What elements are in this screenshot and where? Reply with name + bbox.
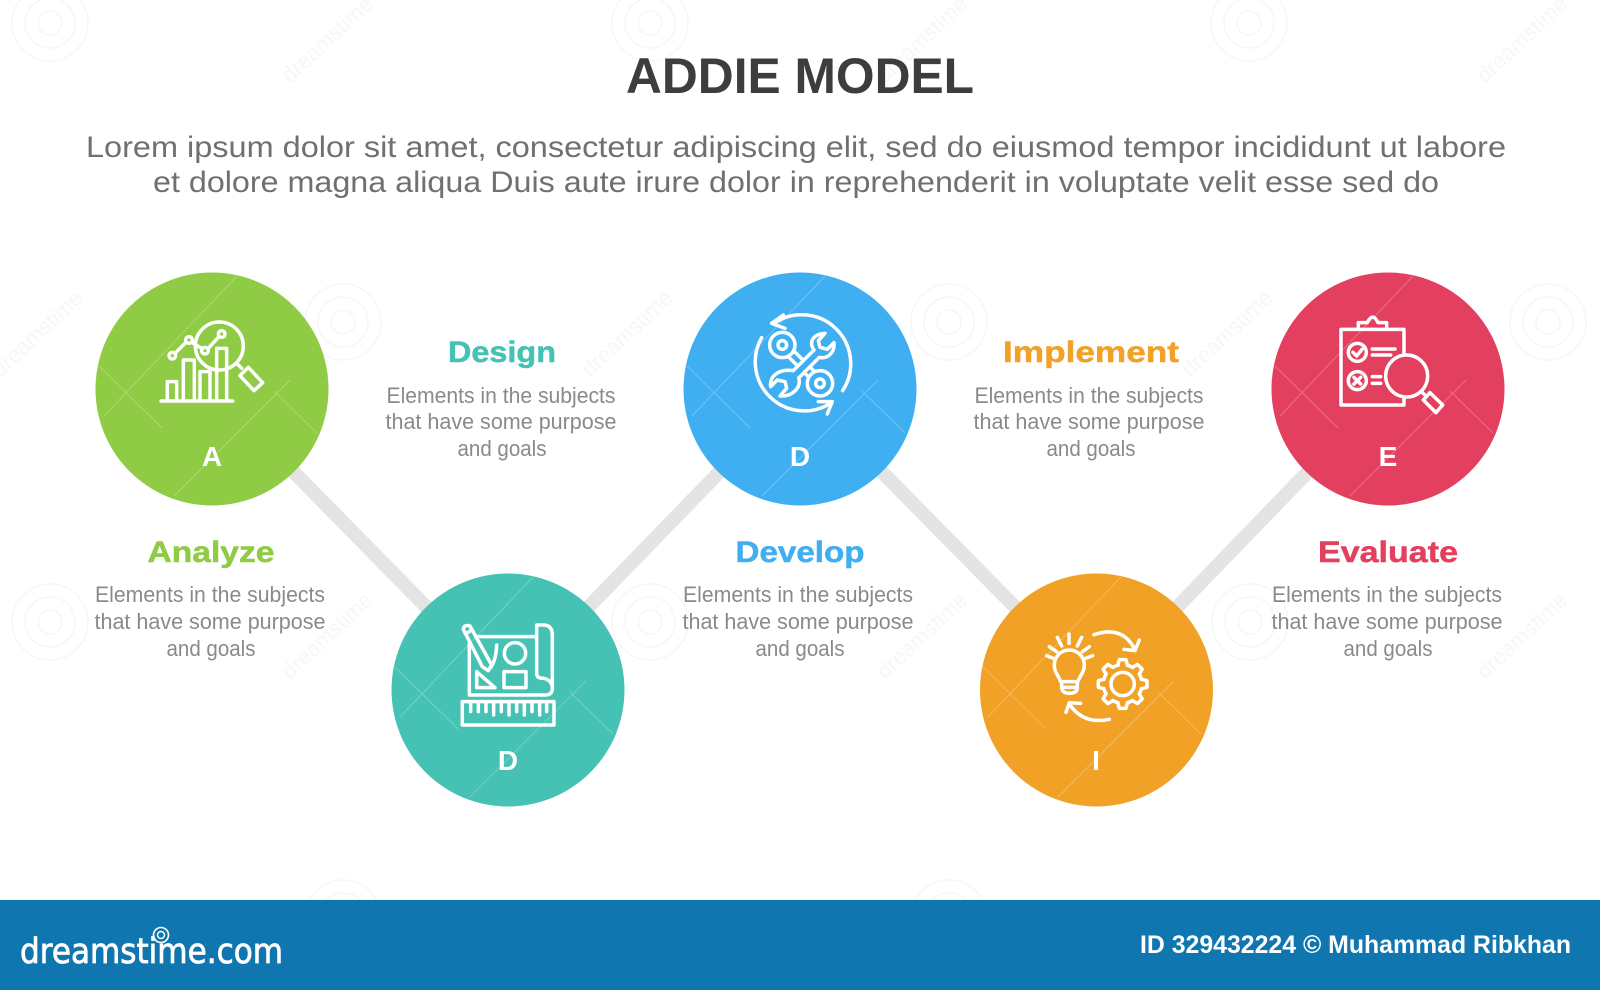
credit text: ID 329432224 © Muhammad Ribkhan (1140, 931, 1571, 959)
text: Evaluate description: Elements in the subjects (1272, 582, 1502, 607)
text: dreamstime (871, 587, 972, 684)
text: Implement description: and goals (1046, 436, 1136, 461)
letter E: E (1379, 441, 1397, 472)
icon: light bulb and gear (1047, 632, 1147, 721)
footer bar (0, 900, 1600, 990)
subtitle text (86, 131, 1506, 199)
text: Implement description: Elements in the subjects (974, 383, 1204, 408)
heading: Design: Design (448, 336, 556, 369)
text: Analyze description: Elements in the subjects (95, 582, 325, 607)
letter I: I (1092, 745, 1100, 776)
letter A: A (202, 441, 222, 472)
step: Design (386, 336, 624, 806)
text: Design description: and goals (458, 436, 546, 461)
text: Evaluate description: that have some purpose (1272, 609, 1502, 634)
circle: A (96, 272, 328, 506)
text: dreamstime (576, 285, 677, 382)
connector zigzag line (212, 389, 1388, 690)
step: Evaluate (1272, 272, 1504, 661)
subtitle text: et dolore magna aliqua Duis aute irure dolor in reprehenderit in voluptate velit esse sed do (153, 166, 1439, 199)
text: Analyze description (94, 582, 326, 661)
circle: D (392, 574, 624, 806)
icon: clipboard with magnifier (1341, 317, 1443, 413)
icon: crossed wrenches with arrows (755, 315, 851, 414)
circle: D (684, 272, 916, 506)
text: dreamstime (1471, 587, 1572, 684)
text: Design description (386, 383, 616, 461)
subtitle text: Lorem ipsum dolor sit amet, consectetur adipiscing elit, sed do eiusmod tempor incididunt ut labore (86, 131, 1506, 164)
letter D: D (498, 745, 518, 776)
text: Evaluate description (1272, 582, 1502, 661)
text: Evaluate description: and goals (1344, 636, 1432, 661)
heading: Evaluate: Evaluate (1318, 536, 1458, 569)
heading: Analyze: Analyze (148, 536, 274, 569)
step: Analyze (94, 272, 328, 661)
heading: Implement: Implement (1003, 336, 1179, 369)
letter D: D (790, 441, 810, 472)
step: Implement (974, 336, 1213, 806)
icon: blueprint and ruler (462, 625, 554, 725)
circle: E (1272, 272, 1504, 506)
step: Develop (682, 272, 916, 661)
text: dreamstime (276, 587, 377, 684)
logo: dreamstime.com: dreamstime.com (20, 932, 283, 972)
text: Develop description: that have some purpose (682, 609, 914, 634)
heading: Develop: Develop (736, 536, 864, 569)
circle: I (980, 574, 1213, 806)
text: dreamstime (1176, 285, 1277, 382)
text: Implement description: that have some purpose (974, 409, 1204, 434)
text: Develop description: and goals (756, 636, 844, 661)
text: Design description: that have some purpose (386, 409, 616, 434)
text: Implement description (974, 383, 1204, 461)
text: Develop description: Elements in the subjects (683, 582, 913, 607)
text: Design description: Elements in the subjects (386, 383, 616, 408)
text: Analyze description: and goals (166, 636, 256, 661)
text: Analyze description: that have some purpose (94, 609, 326, 634)
text: Develop description (682, 582, 914, 661)
icon: chart with magnifier (161, 322, 263, 401)
title: ADDIE MODEL (626, 48, 974, 104)
